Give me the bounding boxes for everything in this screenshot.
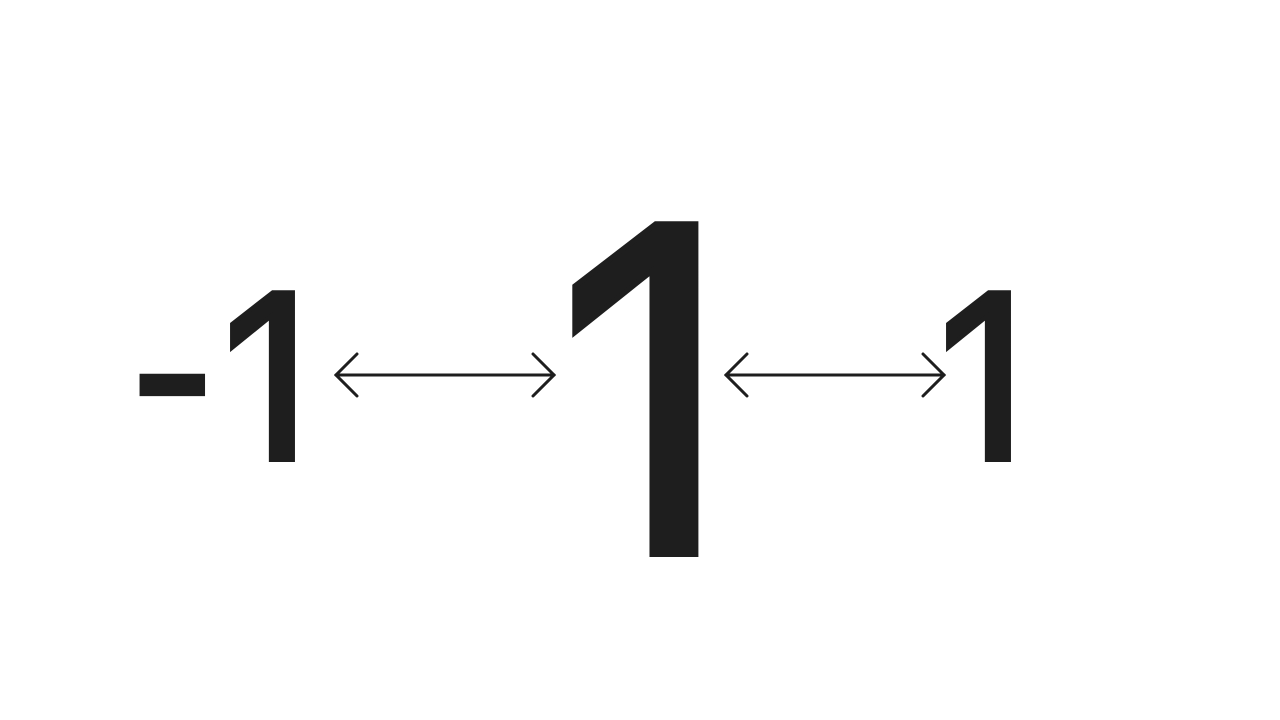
label: one: 1 [924,231,1063,548]
arrow: right double-headed [726,354,944,396]
label: minus one: 1 [208,231,347,548]
label: big one: 1 [527,103,803,720]
label: minus one [140,290,295,462]
diagram [140,221,1011,557]
label: minus one: - [129,220,216,510]
arrow: left double-headed [336,354,554,396]
